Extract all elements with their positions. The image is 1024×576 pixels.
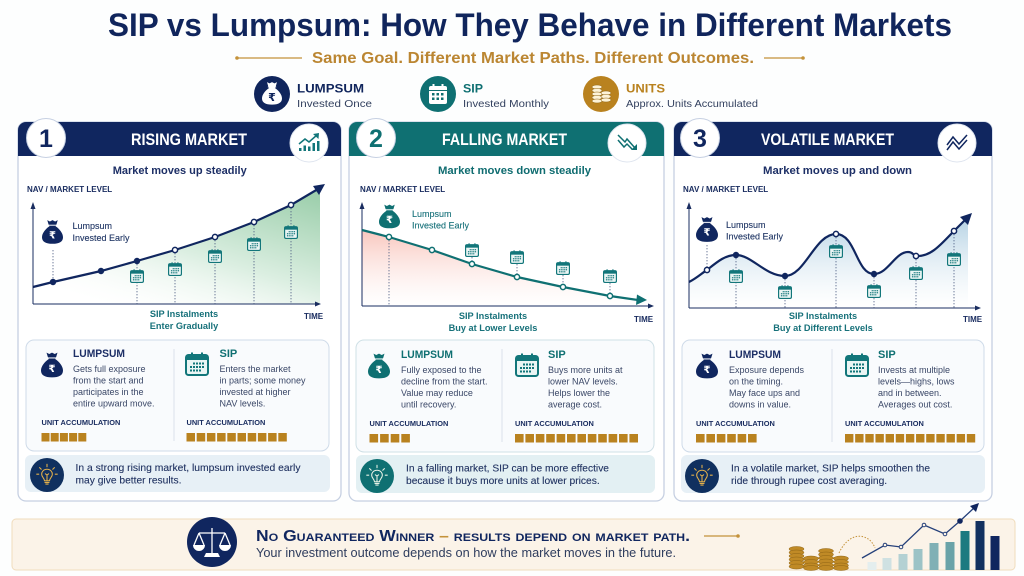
volatile market line chart	[683, 185, 983, 333]
comparison box: falling market: lower NAV levels.	[548, 376, 618, 386]
falling market line chart: Buy at Lower Levels	[449, 323, 537, 333]
rising market line chart: NAV / MARKET LEVEL	[27, 185, 112, 194]
comparison box: falling market: decline from the start.	[401, 376, 488, 386]
header: rising market	[18, 118, 341, 162]
comparison box: rising market: participates in the	[73, 387, 144, 397]
comparison box: volatile market: and in between.	[878, 388, 942, 398]
comparison box: volatile market: Exposure depends	[729, 365, 805, 375]
comparison box: falling market: until recovery.	[401, 400, 456, 410]
comparison box: rising market: invested at higher	[220, 387, 291, 397]
comparison box: rising market: Enters the market	[220, 364, 291, 374]
panel: volatile market	[674, 118, 992, 501]
comparison box: volatile market: SIP	[878, 349, 896, 361]
comparison box: rising market: in parts; some money	[220, 376, 306, 386]
comparison box: volatile market: UNIT ACCUMULATION	[845, 419, 924, 428]
subtitle with gold rules: Same Goal. Different Market Paths. Different Outcomes.	[312, 50, 754, 67]
takeaway: rising market: In a strong rising market, lumpsum invested early	[76, 463, 301, 474]
falling market line chart: Lumpsum	[412, 209, 452, 219]
comparison box: volatile market	[682, 340, 984, 452]
volatile market line chart: Buy at Different Levels	[773, 323, 873, 333]
comparison box: rising market: SIP	[220, 348, 237, 360]
falling market line chart: NAV / MARKET LEVEL	[360, 185, 445, 194]
header: volatile market	[674, 118, 992, 162]
comparison box: volatile market: Averages out cost.	[878, 400, 952, 410]
panel: falling market	[349, 118, 664, 501]
takeaway: volatile market: ride through rupee cost averaging.	[731, 476, 887, 487]
footer banner	[12, 503, 1015, 570]
legend	[254, 76, 758, 112]
comparison box: rising market: ₹	[49, 364, 56, 375]
comparison box: rising market: from the start and	[73, 376, 144, 386]
rising market line chart	[27, 184, 325, 331]
comparison box: volatile market: levels—highs, lows	[878, 376, 955, 386]
comparison box: rising market: LUMPSUM	[73, 348, 125, 360]
comparison box: rising market: NAV levels.	[220, 398, 265, 408]
comparison box: falling market: SIP	[548, 349, 566, 361]
comparison box: falling market: UNIT ACCUMULATION	[370, 419, 448, 428]
comparison box: falling market: average cost.	[548, 400, 602, 410]
legend item: SIP	[420, 76, 550, 112]
panel subtitle: Market moves up and down	[763, 165, 912, 177]
header: falling market	[349, 118, 664, 162]
rising market line chart: Enter Gradually	[150, 321, 219, 331]
takeaway: volatile market	[681, 455, 985, 493]
volatile market line chart: SIP Instalments	[789, 311, 857, 321]
volatile market line chart: ₹	[704, 228, 711, 238]
volatile market line chart: Lumpsum	[726, 220, 766, 230]
header: rising market: RISING MARKET	[131, 131, 247, 149]
panel subtitle: Market moves down steadily	[438, 165, 592, 177]
falling market line chart: ₹	[386, 215, 393, 226]
title: SIP vs Lumpsum: How They Behave in Different Markets	[108, 7, 952, 43]
panel: rising market	[18, 118, 341, 501]
comparison box: falling market: ₹	[376, 365, 383, 376]
comparison box: volatile market: LUMPSUM	[729, 349, 781, 361]
takeaway: falling market	[356, 455, 655, 493]
falling market line chart	[360, 185, 654, 333]
legend item: lumpsum: LUMPSUM	[297, 82, 364, 96]
volatile market line chart: NAV / MARKET LEVEL	[683, 185, 768, 194]
comparison box: rising market: entire upward move.	[73, 398, 155, 408]
comparison box: falling market: Buys more units at	[548, 365, 623, 375]
panel subtitle: Market moves up steadily	[113, 165, 247, 177]
falling market line chart: Invested Early	[412, 220, 470, 230]
comparison box: volatile market: UNIT ACCUMULATION	[696, 419, 775, 428]
header: volatile market: 3	[693, 125, 707, 153]
comparison box: falling market: Helps lower the	[548, 388, 610, 398]
takeaway: rising market: may give better results.	[76, 476, 181, 486]
rising market line chart: ₹	[49, 230, 56, 242]
comparison box: rising market: Gets full exposure	[73, 364, 146, 374]
rising market line chart: SIP Instalments	[150, 309, 218, 319]
header: falling market: FALLING MARKET	[442, 131, 567, 149]
footer text: Your investment outcome depends on how the market moves in the future.	[256, 546, 676, 560]
comparison box: falling market: Fully exposed to the	[401, 365, 482, 375]
legend item: SIP: Invested Monthly	[463, 98, 550, 110]
rising market line chart: Lumpsum	[72, 221, 112, 231]
rising market line chart: TIME	[304, 312, 324, 321]
legend item: lumpsum: Invested Once	[297, 98, 372, 110]
takeaway: falling market: In a falling market, SIP can be more effective	[406, 464, 609, 474]
rising market line chart: Invested Early	[72, 233, 130, 243]
legend item: lumpsum: ₹	[268, 91, 276, 104]
comparison box: rising market: UNIT ACCUMULATION	[186, 418, 265, 427]
legend item: units: Approx. Units Accumulated	[626, 98, 758, 110]
comparison box: volatile market: May face ups and	[729, 388, 800, 398]
icon: balance scales	[187, 517, 237, 567]
legend item: SIP: SIP	[463, 82, 483, 96]
header: volatile market: VOLATILE MARKET	[761, 131, 894, 149]
header: rising market: 1	[39, 125, 53, 153]
comparison box: volatile market: on the timing.	[729, 376, 783, 386]
comparison box: rising market: UNIT ACCUMULATION	[42, 418, 120, 427]
comparison box: falling market	[356, 340, 654, 452]
legend item: units: UNITS	[626, 82, 665, 96]
legend item: lumpsum	[254, 76, 372, 112]
volatile market line chart: Invested Early	[726, 232, 784, 242]
comparison box: falling market: UNIT ACCUMULATION	[515, 419, 594, 428]
comparison box: volatile market: ₹	[704, 365, 711, 376]
takeaway: volatile market: In a volatile market, SIP helps smoothen the	[731, 464, 930, 474]
takeaway: falling market: because it buys more units at lower prices.	[406, 476, 600, 487]
comparison box: volatile market: downs in value.	[729, 400, 791, 410]
comparison box: falling market: Value may reduce	[401, 388, 473, 398]
volatile market line chart: TIME	[963, 315, 983, 324]
falling market line chart: TIME	[634, 315, 654, 324]
header: falling market: 2	[369, 125, 383, 153]
comparison box: rising market	[26, 340, 329, 451]
legend item: units	[583, 76, 758, 112]
illustration: coins and growth bars	[789, 503, 1000, 570]
comparison box: falling market: LUMPSUM	[401, 349, 453, 361]
takeaway: rising market	[25, 455, 330, 492]
comparison box: volatile market: Invests at multiple	[878, 365, 950, 375]
falling market line chart: SIP Instalments	[459, 311, 527, 321]
footer heading: No Guaranteed Winner – results depend on market path.	[256, 528, 690, 545]
